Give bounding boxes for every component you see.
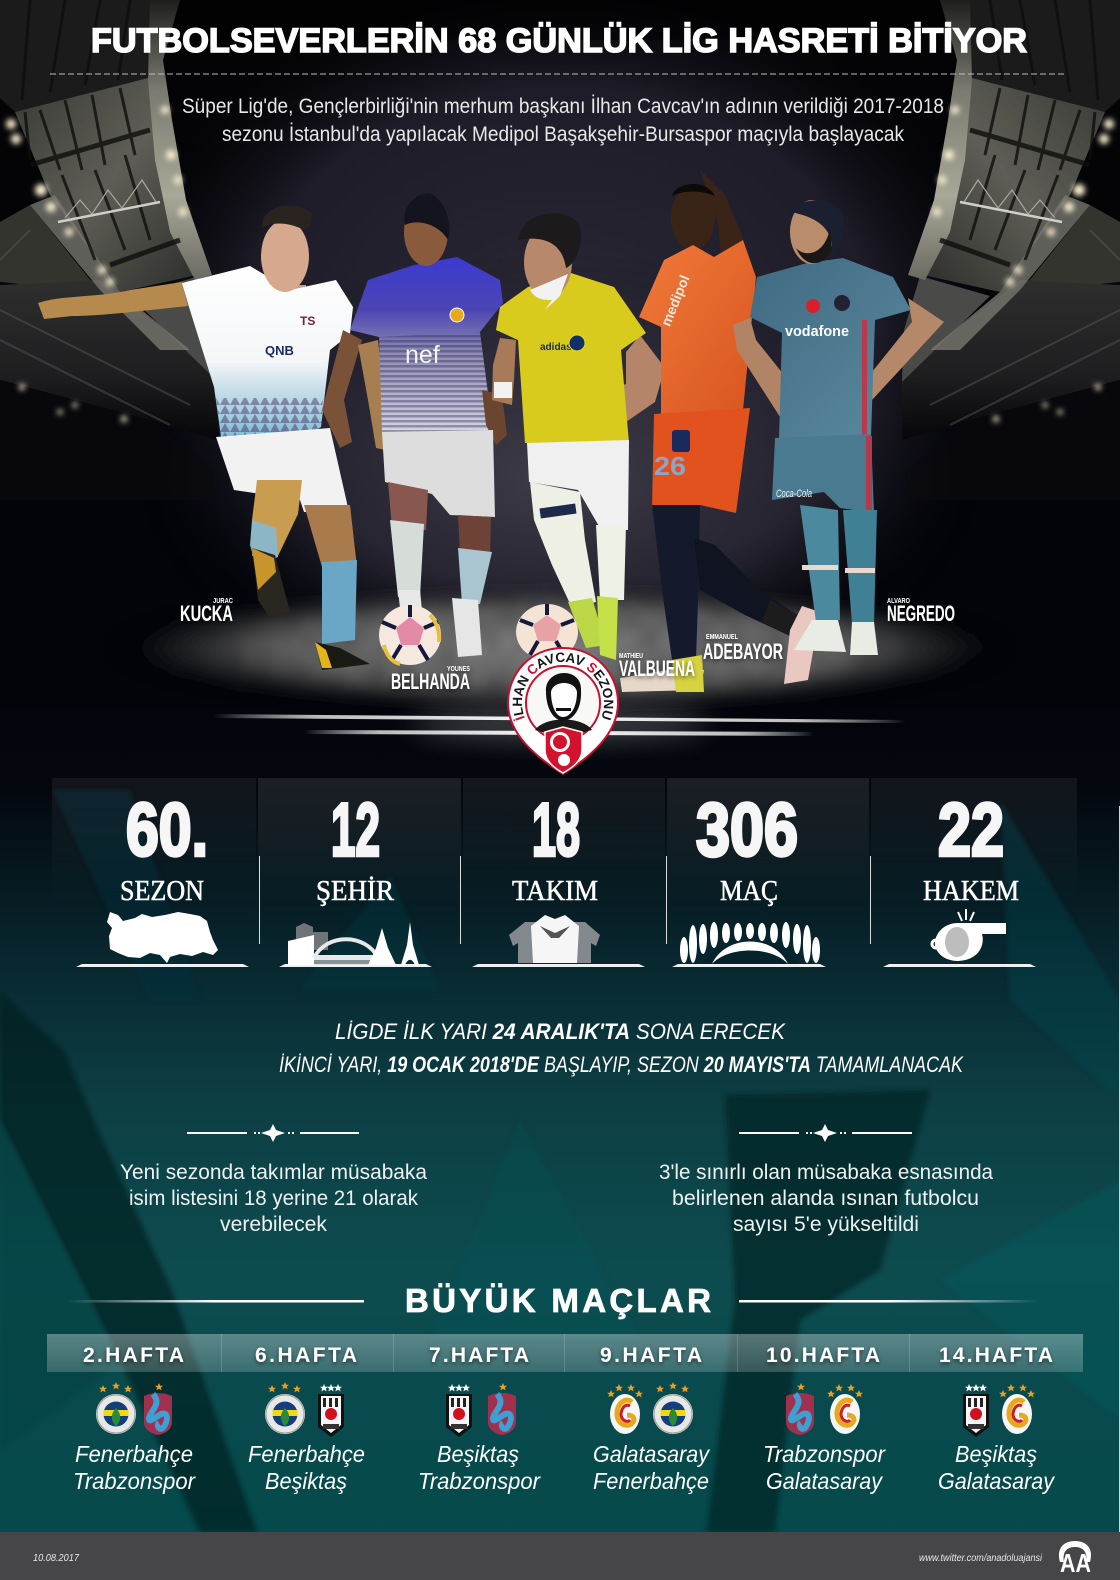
player: Adebayor: medipol [658, 273, 693, 328]
subtitle: Süper Lig'de, Gençlerbirliği'nin merhum başkanı İlhan Cavcav'ın adının verildiği 2017-2018 [182, 95, 944, 118]
heading: big matches: BÜYÜK MAÇLAR [405, 1282, 711, 1319]
label: takim: TAKIM [512, 876, 598, 907]
note right [659, 1161, 993, 1236]
twitter url: www.twitter.com/anadoluajansi [919, 1553, 1043, 1564]
label: mac: MAÇ [720, 876, 778, 907]
player names: ADEBAYOR [703, 639, 783, 664]
match logos [96, 1382, 1035, 1437]
stat number: 12: 12 [331, 788, 380, 872]
week 10: 10.HAFTA [766, 1344, 880, 1367]
match team names: Beşiktaş [437, 1441, 519, 1467]
note right: 3'le sınırlı olan müsabaka esnasında [659, 1161, 993, 1184]
season dates: İKİNCİ YARI, 19 OCAK 2018'DE BAŞLAYIP, SEZON 20 MAYIS'TA TAMAMLANACAK [279, 1052, 964, 1077]
match team names: Fenerbahçe [248, 1441, 365, 1467]
stat number: 18: 18 [532, 788, 580, 872]
ball right [516, 604, 578, 660]
player: Adebayor: 26 [654, 451, 686, 481]
subtitle: sezonu İstanbul'da yapılacak Medipol Başakşehir-Bursaspor maçıyla başlayacak [222, 123, 904, 146]
match team names: Trabzonspor [763, 1441, 886, 1467]
label: sezon: SEZON [120, 876, 204, 907]
note left [120, 1161, 427, 1236]
light streaks [213, 714, 906, 736]
player: Kucka: QNB [265, 343, 294, 358]
match team names: Galatasaray [593, 1441, 710, 1467]
stat number: 22: 22 [938, 788, 1004, 872]
player: Kucka [38, 205, 370, 670]
logo: AA: AA [1060, 1548, 1091, 1578]
stats panels [52, 778, 1077, 967]
player: Belhanda [322, 193, 507, 657]
season badge: İLHAN CAVCAV SEZONU [512, 652, 614, 722]
player names: EMMANUEL [706, 634, 739, 641]
ground and glow [110, 255, 1010, 740]
matches table [47, 1334, 1083, 1494]
player: Negredo: Coca-Cola [776, 488, 812, 500]
season badge [507, 647, 619, 776]
subtitle [182, 95, 944, 146]
season dates: LİGDE İLK YARI 24 ARALIK'TA SONA ERECEK [335, 1019, 786, 1044]
stadium roof right [902, 0, 1120, 500]
match team names: Beşiktaş [955, 1441, 1037, 1467]
player: Valbuena [492, 213, 665, 660]
note right: sayısı 5'e yükseltildi [733, 1213, 919, 1236]
week 9: 9.HAFTA [600, 1344, 702, 1367]
week 7: 7.HAFTA [429, 1344, 529, 1367]
note right: belirlenen alanda ısınan futbolcu [672, 1187, 979, 1210]
icon: whistle [932, 909, 1006, 961]
season dates [279, 1019, 964, 1077]
player names: ALVARO [887, 598, 910, 605]
icon: jerseys [509, 915, 600, 963]
player: Valbuena: adidas [540, 342, 572, 353]
label: sehir: ŞEHİR [316, 876, 394, 907]
week 2: 2.HAFTA [83, 1344, 184, 1367]
player names: NEGREDO [887, 601, 955, 626]
week 6: 6.HAFTA [255, 1344, 357, 1367]
icon: stadium [680, 922, 820, 964]
player: Belhanda: nef [405, 341, 440, 369]
stadium roof left [0, 0, 218, 500]
player: Adebayor [620, 170, 820, 692]
note left: Yeni sezonda takımlar müsabaka [120, 1161, 427, 1184]
player names: JURAC [213, 598, 233, 605]
match team names: Beşiktaş [265, 1468, 347, 1494]
player: Negredo: vodafone [785, 323, 849, 340]
date: 10.08.2017 [33, 1553, 79, 1564]
logo: AA [1059, 1541, 1091, 1578]
player names: YOUNES [447, 666, 470, 673]
footer [0, 1532, 1120, 1580]
match team names: Galatasaray [938, 1468, 1055, 1494]
match team names [73, 1441, 1055, 1494]
ornament right [739, 1124, 912, 1142]
match team names: Trabzonspor [418, 1468, 541, 1494]
stat number: 306: 306 [696, 788, 798, 872]
player names: BELHANDA [391, 669, 470, 694]
player names: VALBUENA [619, 656, 695, 681]
match team names: Fenerbahçe [593, 1468, 709, 1494]
label: hakem: HAKEM [923, 876, 1019, 907]
note left: isim listesini 18 yerine 21 olarak [129, 1187, 418, 1210]
match team names: Trabzonspor [73, 1468, 196, 1494]
dashed divider [50, 73, 1064, 75]
player names: MATHIEU [619, 653, 643, 660]
stat number: 60: 60. [126, 788, 208, 872]
player: Negredo [733, 200, 944, 655]
player: Kucka: TS [300, 314, 315, 328]
icon: turkey map [107, 912, 218, 963]
match team names: Galatasaray [766, 1468, 883, 1494]
player names [180, 598, 955, 694]
note left: verebilecek [220, 1213, 327, 1236]
title: FUTBOLSEVERLERİN 68 GÜNLÜK LİG HASRETİ BİTİYOR [91, 22, 1027, 60]
player names: KUCKA [180, 601, 233, 626]
ornament left [187, 1124, 359, 1142]
week 14: 14.HAFTA [939, 1344, 1053, 1367]
match team names: Fenerbahçe [75, 1441, 193, 1467]
icon: city skyline [288, 922, 419, 965]
ball left [379, 605, 441, 665]
